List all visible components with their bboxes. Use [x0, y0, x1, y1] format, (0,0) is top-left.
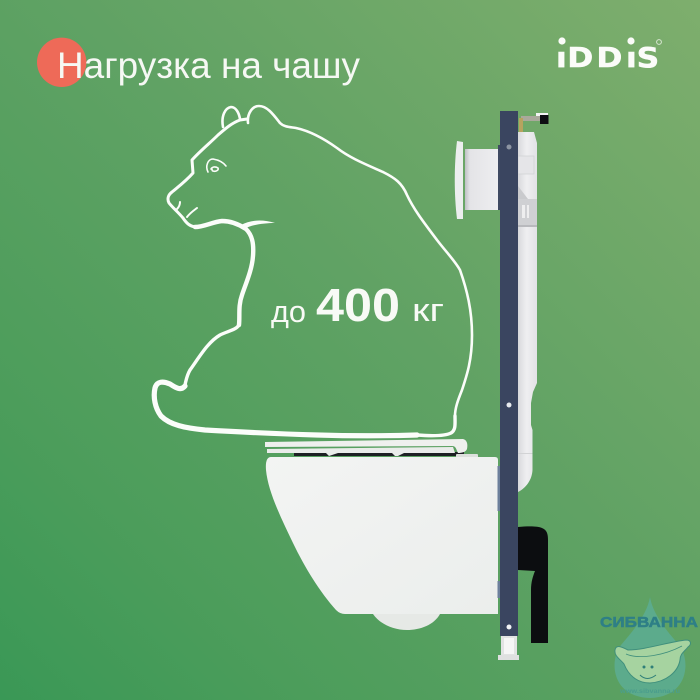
title with red circle: [37, 38, 360, 87]
flush plate: [455, 141, 463, 219]
bear chest and paw: [185, 325, 239, 385]
bear lower right closure: [417, 416, 455, 436]
frame bolts: [506, 144, 512, 630]
frame highlight: [498, 145, 500, 210]
icon: red circle: [37, 38, 86, 87]
watermark: Sibvanna: [600, 597, 699, 698]
title text: Нагрузка на чашу: [57, 45, 360, 86]
bear outline illustration: [154, 106, 472, 436]
weight label: до: [271, 294, 306, 329]
bear paw and tail loop: [154, 382, 417, 436]
toilet foot: [373, 614, 440, 630]
toilet seat and lid: [265, 439, 478, 458]
flush cylinder: [465, 149, 498, 210]
watermark tub: [615, 640, 690, 683]
cistern fittings: [518, 156, 537, 454]
logo: IDDIS: ıDDıS: [556, 42, 659, 75]
upper lid: [265, 439, 467, 453]
bear mouth: [177, 202, 197, 217]
frame foot: [498, 636, 519, 660]
frame upright: [500, 111, 518, 636]
watermark name: СИБВАННА: [600, 615, 699, 631]
steel frame: [498, 111, 519, 660]
watermark tub face: [640, 666, 656, 678]
toilet bowl: [266, 457, 498, 614]
watermark url: www.sibvanna.ru: [619, 689, 680, 695]
black drain pipe: [518, 526, 548, 643]
weight label: [271, 279, 444, 331]
neck whisker: [241, 221, 275, 229]
flush button: [455, 141, 498, 219]
lower seat: [267, 447, 455, 456]
wall bracket plates: [498, 466, 500, 598]
weight label: кг: [412, 292, 444, 328]
cistern body and waste pipe: [518, 132, 537, 492]
watermark tub rim: [626, 646, 682, 657]
bear back: [280, 123, 472, 416]
bear head and snout: [168, 119, 247, 227]
weight label: 400: [316, 279, 400, 331]
watermark drop: [615, 597, 685, 698]
installation: cistern: [518, 113, 548, 492]
black gap: [294, 452, 464, 456]
bear jaw and neck: [195, 221, 253, 325]
seat hinge: [456, 454, 478, 458]
cistern top bracket: [519, 113, 548, 132]
bear eye: [207, 159, 226, 172]
bear ears: [222, 106, 280, 127]
